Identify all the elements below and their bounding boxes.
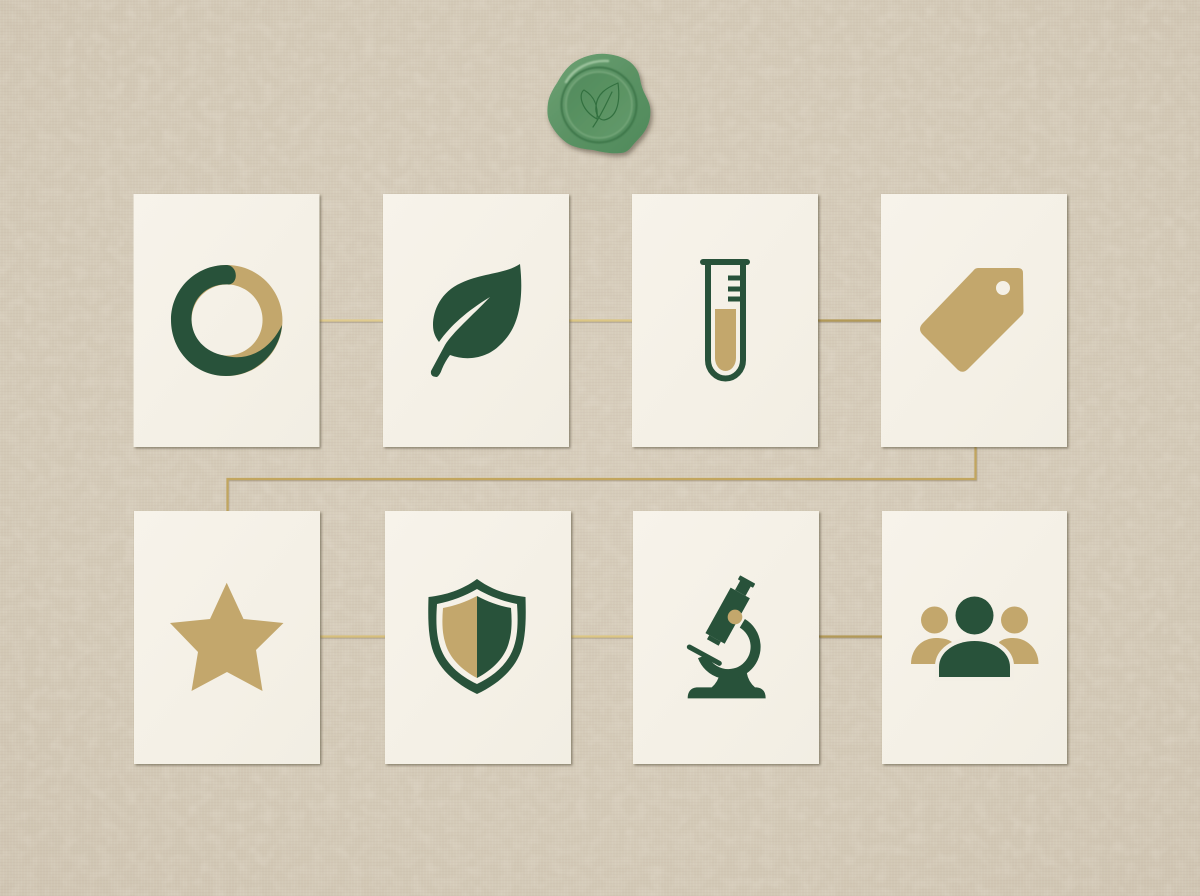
card 5: star xyxy=(134,511,320,764)
card 8: people xyxy=(882,511,1067,764)
card 6: shield xyxy=(385,511,571,764)
card 4: price tag xyxy=(881,194,1067,447)
card 7: microscope xyxy=(633,511,819,764)
icon: people group xyxy=(911,596,1038,681)
wax seal xyxy=(547,54,650,153)
card 1: ring xyxy=(134,194,320,447)
icon: ring xyxy=(171,265,282,376)
icon: shield xyxy=(428,579,526,694)
icon: price tag xyxy=(920,268,1024,372)
icon: leaf xyxy=(431,264,521,377)
seal leaf emblem xyxy=(581,83,619,127)
icon: star xyxy=(170,583,284,691)
icon: microscope xyxy=(688,574,766,698)
card 3: test tube xyxy=(632,194,818,447)
card 2: leaf xyxy=(383,194,569,447)
connectors xyxy=(228,320,976,636)
icon: test tube xyxy=(700,259,750,378)
